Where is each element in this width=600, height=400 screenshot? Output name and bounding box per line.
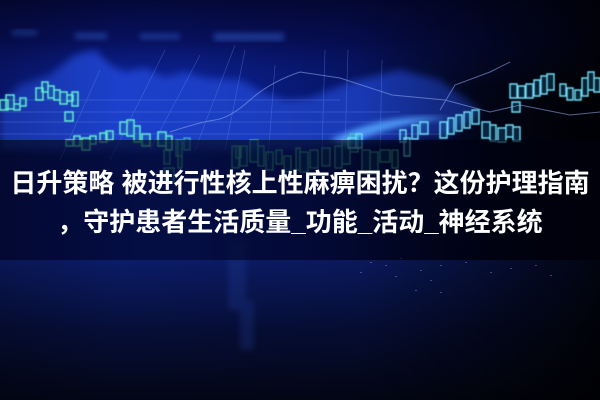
reflection glow and dots: [228, 240, 254, 350]
candlestick groups: [0, 82, 172, 150]
title: 日升策略 被进行性核上性麻痹困扰？这份护理指南: [10, 163, 590, 200]
trend lines: [170, 62, 600, 132]
light arc: [330, 117, 450, 145]
grid lines: [0, 45, 440, 160]
blurred streaks: [12, 30, 284, 41]
dark title band: [0, 140, 600, 260]
title: [10, 163, 590, 237]
title: ，守护患者生活质量_功能_活动_神经系统: [57, 207, 543, 237]
blue mountain silhouette: [0, 50, 480, 150]
lower floor: [0, 260, 600, 400]
